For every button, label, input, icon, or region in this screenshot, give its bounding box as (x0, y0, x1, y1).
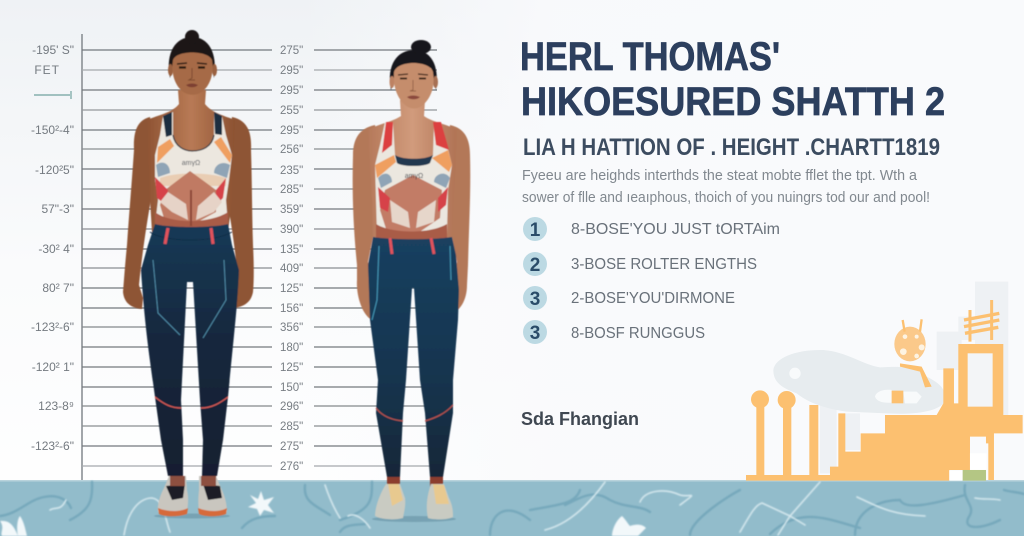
right height labels (280, 45, 303, 473)
left height labels: 57"-3" (41, 202, 74, 216)
left height labels: -123²-6" (31, 439, 74, 453)
right height labels: 295" (280, 85, 303, 97)
list item 1 (523, 217, 780, 241)
list item 1: 1 (530, 220, 541, 241)
author name: Sda Fhangian (521, 408, 639, 429)
list item 3: 2-BOSE'YOU'DIRMONE (571, 290, 735, 307)
floor flowers (0, 491, 646, 536)
right height labels: 256" (280, 144, 303, 156)
right height labels: 276" (280, 461, 303, 473)
right height labels: 156" (280, 303, 303, 315)
leggings (368, 237, 459, 477)
list item 2: 2 (530, 255, 540, 276)
subtitle: LIA H HATTION OF . HEIGHT .CHARTT1819 (523, 134, 940, 161)
figure: left athlete (123, 30, 254, 518)
marker tick (34, 91, 71, 99)
right height labels: 150" (280, 382, 303, 394)
list item 4 (523, 320, 705, 344)
title: HIKOESURED SHATTH 2 (521, 80, 945, 124)
right height labels: 275" (280, 441, 303, 453)
right height labels: 295" (280, 65, 303, 77)
figure: right athlete (353, 40, 470, 522)
arms (123, 117, 156, 309)
left height labels (31, 43, 74, 453)
left height labels: 123-8⁹ (38, 399, 74, 413)
tank top: amγΩ (405, 173, 423, 180)
torso (368, 100, 457, 240)
floor panel (0, 480, 1024, 536)
pale cloud shape (773, 350, 945, 414)
face (168, 52, 217, 95)
pale background buildings (820, 282, 1008, 473)
left height labels: -120²5" (35, 163, 74, 177)
title (520, 35, 945, 124)
tank top (155, 112, 232, 228)
shoes (154, 476, 230, 518)
left height labels: -123²-6" (31, 320, 74, 334)
shoes (372, 477, 456, 522)
leggings (141, 224, 239, 476)
left height labels: FET (34, 63, 60, 77)
tank top (375, 122, 452, 240)
right height labels: 409" (280, 263, 303, 275)
orange structures (746, 300, 1023, 481)
hair bun (390, 50, 437, 90)
torso (147, 90, 235, 232)
list item 3: 3 (530, 289, 540, 310)
left height labels: 80² 7" (42, 281, 74, 295)
list item 2: 3-BOSE ROLTER ENGTHS (571, 256, 757, 273)
paragraph: sower of flle and ıeaıphous, thoich of you nuingrs tod our and pool! (522, 190, 930, 206)
right height labels: 285" (280, 184, 303, 196)
right height labels: 356" (280, 322, 303, 334)
right height labels: 125" (280, 283, 303, 295)
left height labels: -30² 4" (38, 242, 74, 256)
right height labels: 135" (280, 244, 303, 256)
tank top: amγΩ (182, 160, 200, 167)
hair bun (169, 37, 215, 78)
left height labels: -150²-4" (31, 123, 74, 137)
face (390, 63, 438, 108)
right height labels: 285" (280, 421, 303, 433)
left height labels: -120² 1" (32, 360, 74, 374)
right height labels: 359" (280, 204, 303, 216)
list item 4: 3 (530, 323, 540, 344)
illustration: orange skyline (746, 282, 1023, 481)
numbered list (523, 217, 780, 344)
right height labels: 125" (280, 362, 303, 374)
paragraph: Fyeeu are heighds interthds the steat mobte fflet the tpt. Wth a (522, 168, 918, 184)
list item 1: 8-BOSE'YOU JUST tORTAim (571, 221, 780, 238)
paragraph (522, 168, 930, 206)
list item 2 (523, 252, 757, 276)
right height labels: 275" (280, 45, 303, 57)
title: HERL THOMAS' (520, 35, 780, 79)
right height labels: 235" (280, 165, 303, 177)
right height labels: 255" (280, 105, 303, 117)
right height labels: 295" (280, 125, 303, 137)
arms (353, 125, 382, 320)
list item 3 (523, 286, 735, 310)
left height labels: -195' S" (32, 43, 74, 57)
right height labels: 296" (280, 401, 303, 413)
right height labels: 180" (280, 342, 303, 354)
height ruler lines (82, 34, 437, 480)
list item 4: 8-BOSF RUNGGUS (571, 325, 705, 342)
right height labels: 390" (280, 224, 303, 236)
floor squiggles (0, 482, 1024, 535)
